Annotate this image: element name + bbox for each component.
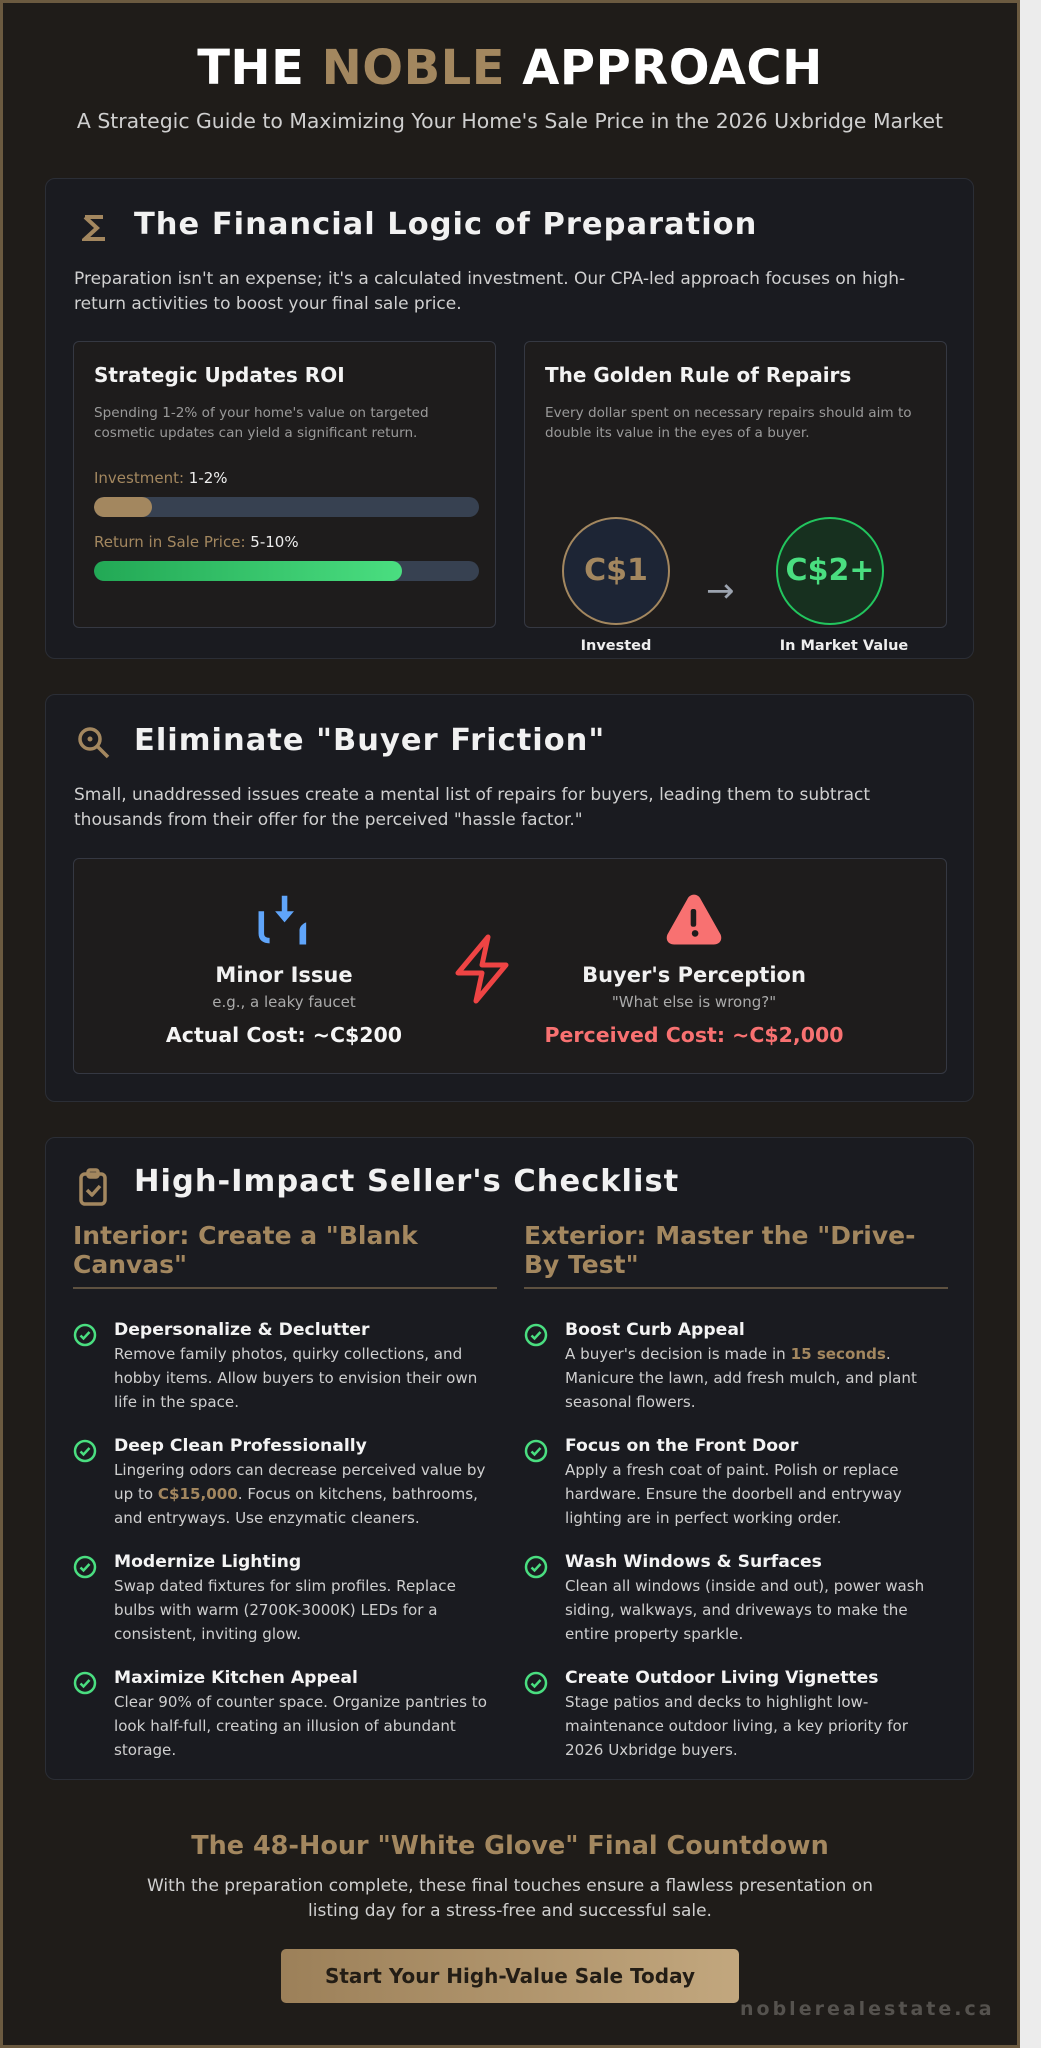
circle: C$2+: C$2+ bbox=[786, 553, 874, 588]
item 3: Wash Windows & Surfaces bbox=[565, 1552, 822, 1572]
card: golden rule: The Golden Rule of Repairs bbox=[545, 363, 851, 387]
buyer perception column: "What else is wrong?" bbox=[612, 993, 776, 1011]
item 3 bbox=[524, 1552, 924, 1643]
column: exterior bbox=[524, 1221, 948, 1759]
title: THE NOBLE APPROACH bbox=[197, 40, 823, 96]
item 3: bulbs with warm (2700K-3000K) LEDs for a bbox=[114, 1601, 438, 1619]
panel: financial logic bbox=[45, 178, 974, 659]
icon: clipboard bbox=[79, 1168, 107, 1206]
bar: investment: Investment: 1-2% bbox=[94, 469, 228, 487]
item 1 bbox=[524, 1320, 917, 1411]
item 1 bbox=[74, 1320, 477, 1411]
card: golden rule bbox=[524, 341, 947, 628]
intro text: Preparation isn't an expense; it's a calculated investment. Our CPA-led approach focuses on high-return activities to boost your final sale price. bbox=[74, 269, 905, 314]
CTA button bbox=[281, 1949, 739, 2003]
subtitle: A Strategic Guide to Maximizing Your Home's Sale Price in the 2026 Uxbridge Market bbox=[77, 109, 943, 133]
icon: warning bbox=[666, 894, 722, 944]
item 1: seasonal flowers. bbox=[565, 1393, 696, 1411]
card: strategic updates ROI bbox=[73, 341, 496, 628]
item 2: lighting are in perfect working order. bbox=[565, 1509, 841, 1527]
footer text: With the preparation complete, these final touches ensure a flawless presentation on listing day for a stress-free and successful sale. bbox=[147, 1876, 873, 1921]
CTA button: Start Your High-Value Sale Today bbox=[325, 1964, 695, 1988]
minor issue column: Actual Cost: ~C$200 bbox=[166, 1023, 402, 1047]
item 4: Maximize Kitchen Appeal bbox=[114, 1668, 358, 1688]
circle: C$1: C$1 bbox=[584, 553, 648, 588]
item 2: Deep Clean Professionally bbox=[114, 1436, 367, 1456]
item 1: Boost Curb Appeal bbox=[565, 1320, 745, 1340]
icon: magnifier bbox=[78, 727, 110, 758]
item 4: maintenance outdoor living, a key priority for bbox=[565, 1717, 908, 1735]
item 2: Apply a fresh coat of paint. Polish or replace bbox=[565, 1461, 899, 1479]
item 1: Manicure the lawn, add fresh mulch, and plant bbox=[565, 1369, 917, 1387]
label: invested: Invested bbox=[581, 638, 651, 654]
icon: scale bbox=[82, 215, 105, 241]
bar: return: Return in Sale Price: 5-10% bbox=[94, 533, 299, 551]
column: interior bbox=[73, 1221, 497, 1759]
item 2 bbox=[524, 1436, 902, 1527]
item 3: consistent, inviting glow. bbox=[114, 1625, 301, 1643]
item 4 bbox=[524, 1668, 908, 1759]
buyer perception column: Perceived Cost: ~C$2,000 bbox=[544, 1023, 844, 1047]
item 3: Swap dated fixtures for slim profiles. Replace bbox=[114, 1577, 456, 1595]
item 4: Stage patios and decks to highlight low- bbox=[565, 1693, 868, 1711]
item 1: A buyer's decision is made in 15 seconds. bbox=[565, 1345, 891, 1363]
panel: checklist bbox=[45, 1137, 974, 1780]
item 3: entire property sparkle. bbox=[565, 1625, 743, 1643]
label: market value: In Market Value bbox=[780, 638, 908, 654]
item 1: life in the space. bbox=[114, 1393, 239, 1411]
icon: faucet drip bbox=[258, 896, 306, 944]
card: strategic updates ROI: Strategic Updates ROI bbox=[94, 363, 345, 387]
item 2: Focus on the Front Door bbox=[565, 1436, 798, 1456]
circle: C$1 bbox=[562, 517, 670, 625]
item 1: hobby items. Allow buyers to envision their own bbox=[114, 1369, 477, 1387]
column heading bbox=[73, 1221, 497, 1289]
item 3: Modernize Lighting bbox=[114, 1552, 301, 1572]
item 1: Depersonalize & Declutter bbox=[114, 1320, 369, 1340]
item 4: look half-full, creating an illusion of abundant bbox=[114, 1717, 456, 1735]
item 4: Clear 90% of counter space. Organize pantries to bbox=[114, 1693, 487, 1711]
heading: High-Impact Seller's Checklist bbox=[134, 1164, 679, 1199]
item 2: hardware. Ensure the doorbell and entryway bbox=[565, 1485, 902, 1503]
buyer perception column bbox=[544, 894, 844, 1047]
footer heading: The 48-Hour "White Glove" Final Countdown bbox=[191, 1831, 829, 1861]
item 3 bbox=[74, 1552, 456, 1643]
icon: lightning bbox=[456, 934, 508, 1004]
item 4 bbox=[74, 1668, 487, 1759]
item 4: storage. bbox=[114, 1741, 176, 1759]
item 1: Remove family photos, quirky collections, and bbox=[114, 1345, 462, 1363]
intro text: Small, unaddressed issues create a mental list of repairs for buyers, leading them to subtract thousands from their offer for the perceived "hassle factor." bbox=[74, 785, 870, 830]
minor issue column bbox=[166, 896, 402, 1047]
heading: Eliminate "Buyer Friction" bbox=[134, 723, 605, 758]
minor issue column: e.g., a leaky faucet bbox=[212, 993, 356, 1011]
buyer perception column: Buyer's Perception bbox=[582, 963, 806, 987]
column heading: Interior: Create a "Blank Canvas" bbox=[73, 1221, 418, 1279]
item 4: 2026 Uxbridge buyers. bbox=[565, 1741, 738, 1759]
item 2: Lingering odors can decrease perceived value by bbox=[114, 1461, 485, 1479]
item 4: Create Outdoor Living Vignettes bbox=[565, 1668, 879, 1688]
minor issue column: Minor Issue bbox=[215, 963, 353, 987]
circle: C$2+ bbox=[776, 517, 884, 625]
item 2: up to C$15,000. Focus on kitchens, bathrooms, bbox=[114, 1485, 478, 1503]
comparison box bbox=[73, 858, 947, 1074]
item 2: and entryways. Use enzymatic cleaners. bbox=[114, 1509, 420, 1527]
item 3: siding, walkways, and driveways to make the bbox=[565, 1601, 908, 1619]
card: strategic updates ROI: Spending 1-2% of your home's value on targeted cosmetic updates can yield a significant return. bbox=[94, 405, 429, 441]
watermark: noblerealestate.ca bbox=[740, 1998, 995, 2020]
arrow: → bbox=[706, 571, 734, 611]
panel: buyer friction bbox=[45, 694, 974, 1102]
item 3: Clean all windows (inside and out), power wash bbox=[565, 1577, 924, 1595]
column heading: Exterior: Master the "Drive-By Test" bbox=[524, 1221, 916, 1279]
heading: The Financial Logic of Preparation bbox=[134, 207, 757, 242]
item 2 bbox=[74, 1436, 485, 1527]
card: golden rule: Every dollar spent on necessary repairs should aim to double its value in the eyes of a buyer. bbox=[545, 405, 912, 441]
